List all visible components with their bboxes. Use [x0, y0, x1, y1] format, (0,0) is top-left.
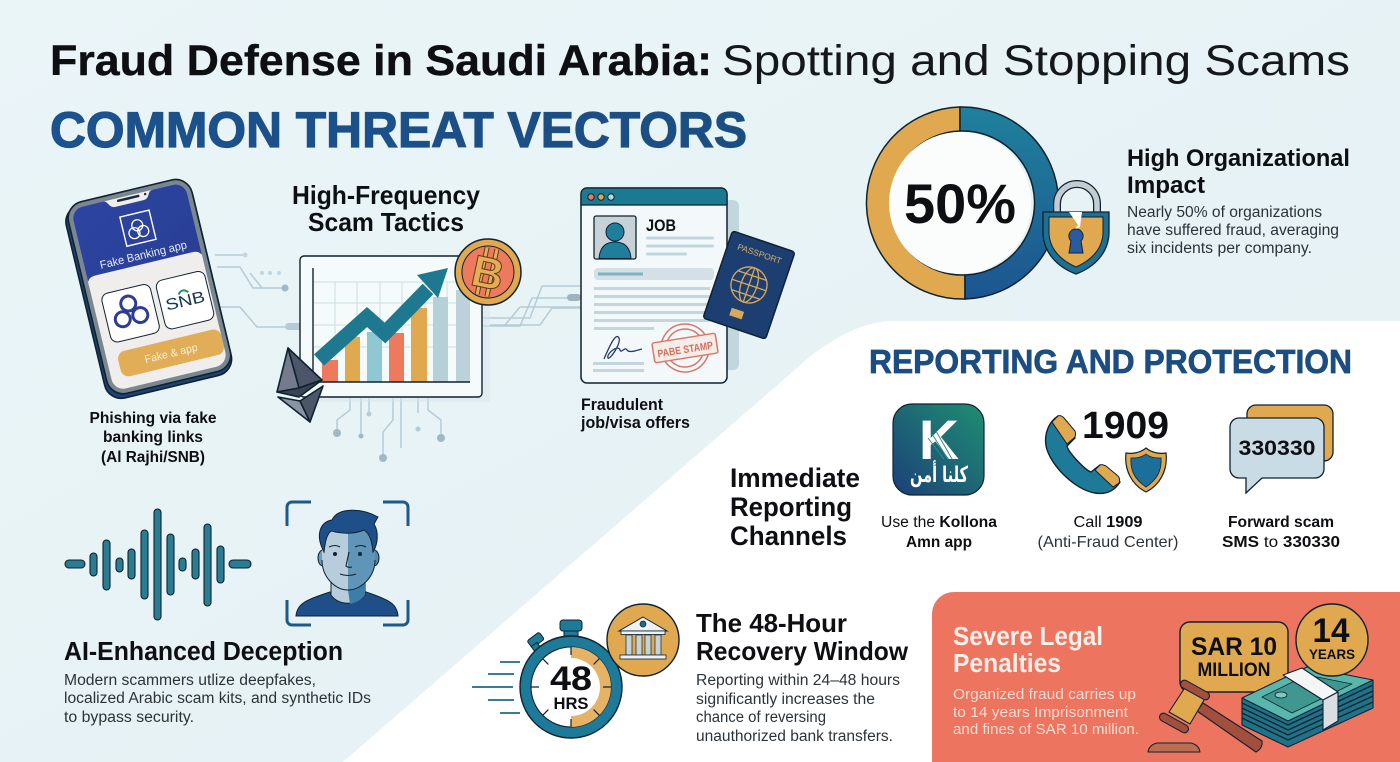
stamp: PABE STAMP [657, 340, 714, 360]
text block: high organizational impact: Impact [1127, 172, 1205, 199]
text block: high organizational impact: High Organizational [1127, 145, 1350, 172]
text block: AI-enhanced deception [64, 638, 371, 726]
tile: SNB [155, 270, 215, 330]
text block: high organizational impact: have suffered fraud, averaging [1127, 222, 1339, 239]
label: HRS: HRS [554, 694, 588, 713]
caption: forward SMS [1222, 514, 1340, 551]
text block: AI-enhanced deception: localized Arabic scam kits, and synthetic IDs [64, 690, 371, 707]
icon: Kollona Amn app: كلنا أمن [910, 459, 968, 488]
icon: SMS bubbles 330330 [1230, 405, 1333, 493]
title: Fraud Defense in Saudi Arabia: [50, 37, 712, 85]
label: fake banking app: Fake Banking app [99, 239, 188, 272]
icon: stopwatch 48 hrs [472, 620, 622, 738]
heading: high-frequency scam tactics: Scam Tactics [308, 207, 464, 237]
icon: bitcoin coin: B [467, 246, 508, 301]
text: penalties description: and fines of SAR 10 million. [953, 721, 1139, 738]
photo [594, 216, 636, 259]
text block: 48-hour recovery window: unauthorized bank transfers. [696, 728, 893, 745]
icon: Kollona Amn app [893, 404, 984, 495]
icon: phone call 1909 [1046, 405, 1169, 493]
icon: bitcoin coin [455, 239, 521, 305]
icon: broken-lock donut chart 50% [866, 107, 1109, 299]
value: 50%: 50% [904, 172, 1016, 235]
caption: call 1909: Call 1909 [1074, 514, 1143, 531]
icon: 14 years badge: YEARS [1309, 646, 1355, 662]
text block: AI-enhanced deception: to bypass security. [64, 709, 194, 726]
stamp [650, 319, 720, 377]
caption: Kollona Amn: Amn app [906, 534, 972, 551]
text block: 48-hour recovery window [696, 608, 909, 745]
circuit lines [215, 252, 581, 462]
caption: forward SMS: SMS to 330330 [1222, 534, 1340, 551]
text: penalties description: Organized fraud carries up [953, 686, 1136, 703]
title: Spotting and Stopping Scams [722, 37, 1350, 85]
subheading: immediate reporting channels [730, 463, 860, 551]
card: SAR 10 million [1180, 622, 1288, 692]
text block: 48-hour recovery window: Reporting within 24–48 hours [696, 672, 900, 689]
caption: phishing: Phishing via fake [90, 410, 217, 427]
icon: passport [703, 231, 795, 339]
icon: job offer document [581, 188, 739, 383]
label: 48: 48 [550, 660, 592, 698]
text block: 48-hour recovery window: significantly increases the [696, 691, 875, 708]
text block: high organizational impact: Nearly 50% of organizations [1127, 204, 1322, 221]
title [50, 37, 1350, 85]
caption: call 1909 [1038, 514, 1178, 551]
subheading: immediate reporting channels: Immediate [730, 463, 860, 493]
heading: severe legal penalties: Penalties [953, 650, 1061, 678]
text block: AI-enhanced deception: Modern scammers utlize deepfakes, [64, 672, 316, 689]
icon: 14 years badge [1296, 604, 1368, 676]
tile: SNB: SNB [164, 289, 207, 315]
heading: reporting and protection: REPORTING AND PROTECTION [869, 343, 1352, 380]
heading: severe legal penalties [953, 623, 1103, 678]
heading: high-frequency scam tactics: High-Frequency [292, 180, 480, 210]
icon: ethereum [277, 348, 323, 422]
tile: Al Rajhi [100, 283, 161, 343]
arrow: rising trend [319, 289, 428, 360]
text block: high organizational impact [1127, 145, 1350, 257]
caption: forward SMS: Forward scam [1228, 514, 1334, 531]
icon: 14 years badge: 14 [1312, 612, 1350, 650]
text block: 48-hour recovery window: Recovery Window [696, 636, 909, 666]
card: SAR 10 million: MILLION [1198, 660, 1270, 681]
button: fake app [116, 328, 226, 378]
bar chart with rising arrow [300, 256, 490, 402]
icon: broken padlock [1043, 184, 1109, 274]
heading: high-frequency scam tactics [292, 180, 480, 237]
text block: 48-hour recovery window: The 48-Hour [696, 608, 847, 638]
number: 330330: 330330 [1238, 437, 1316, 460]
icon: gavel [1148, 679, 1262, 752]
caption: call 1909: (Anti-Fraud Center) [1038, 534, 1178, 551]
text block: high organizational impact: six incidents per company. [1127, 240, 1312, 257]
subheading: immediate reporting channels: Reporting [730, 492, 852, 522]
caption: Kollona Amn: Use the Kollona [881, 514, 997, 531]
icon: shield [1126, 448, 1166, 492]
number: 1909: 1909 [1082, 405, 1169, 447]
icon: fake banking phone [62, 176, 235, 402]
text: penalties description: to 14 years Imprisonment [953, 704, 1129, 721]
icon: cash stack [1242, 667, 1373, 747]
icon: passport: PASSPORT [736, 242, 783, 266]
caption: phishing: (Al Rajhi/SNB) [101, 449, 205, 466]
subheading: immediate reporting channels: Channels [730, 521, 847, 551]
caption: phishing [90, 410, 217, 466]
caption: Kollona Amn [881, 514, 997, 551]
label: job: JOB [646, 216, 676, 235]
icon: Kollona Amn app: K [919, 408, 959, 471]
text block: 48-hour recovery window: chance of reversing [696, 709, 826, 726]
heading: severe legal penalties: Severe Legal [953, 623, 1103, 651]
icon: bank [607, 604, 679, 676]
caption: fraudulent job offers: job/visa offers [580, 414, 690, 432]
caption: fraudulent job offers: Fraudulent [581, 396, 663, 414]
icon: voice waveform [65, 509, 251, 620]
heading: common threat vectors: COMMON THREAT VECTORS [50, 102, 747, 158]
signature [604, 336, 642, 359]
button: fake app: Fake & app [144, 342, 199, 366]
caption: phishing: banking links [103, 429, 203, 446]
text: penalties description [953, 686, 1139, 738]
caption: fraudulent job offers [580, 396, 690, 432]
icon: face scan [287, 502, 408, 625]
panel: severe legal penalties [932, 592, 1400, 762]
text block: AI-enhanced deception: AI-Enhanced Deception [64, 638, 343, 666]
card: SAR 10 million: SAR 10 [1191, 633, 1277, 661]
bank logo box [120, 210, 156, 246]
